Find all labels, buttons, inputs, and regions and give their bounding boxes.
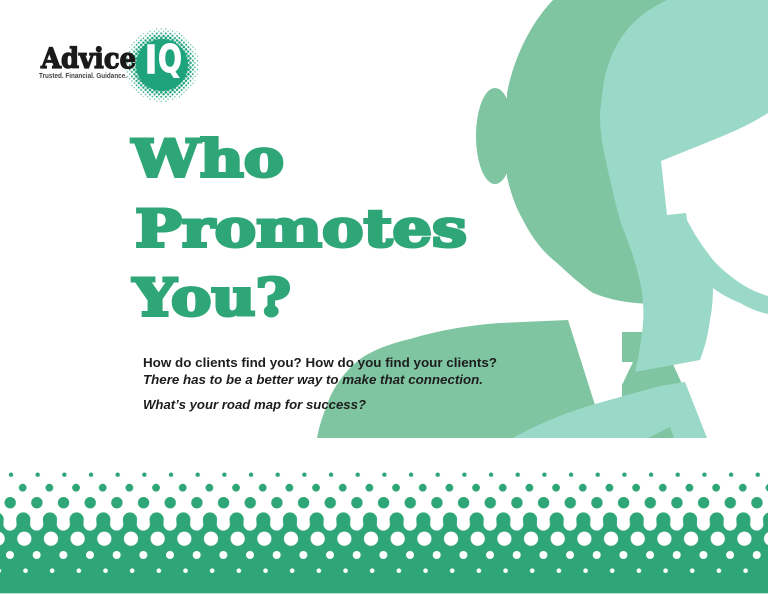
intro text: What’s your road map for success?	[143, 397, 366, 412]
halftone badge	[125, 28, 199, 102]
shoulder, dark green	[317, 320, 610, 438]
logo: AdviceIQ	[39, 28, 199, 102]
intro text: How do clients find you? How do you find your clients?	[143, 355, 497, 370]
head silhouette, dark green	[507, 0, 667, 304]
wordmark Advice: Advice	[40, 42, 136, 75]
intro text: There has to be a better way to make that connection.	[143, 372, 483, 387]
title: Promotes	[135, 200, 467, 260]
title: Who	[131, 130, 284, 190]
title	[131, 130, 467, 328]
ear	[476, 88, 514, 184]
tagline: Trusted. Financial. Guidance.	[39, 71, 127, 80]
collar detail	[648, 427, 674, 438]
wordmark Q: Q	[158, 37, 182, 81]
neck block	[622, 332, 646, 362]
illustration: two facing silhouettes	[317, 0, 768, 438]
halftone footer band	[0, 470, 768, 593]
facing head silhouette, light teal	[600, 0, 768, 372]
wordmark I: I	[145, 38, 157, 82]
title: You?	[132, 268, 291, 328]
intro text	[143, 355, 497, 412]
lower shoulder, light teal	[513, 382, 707, 438]
chest block	[622, 362, 682, 397]
